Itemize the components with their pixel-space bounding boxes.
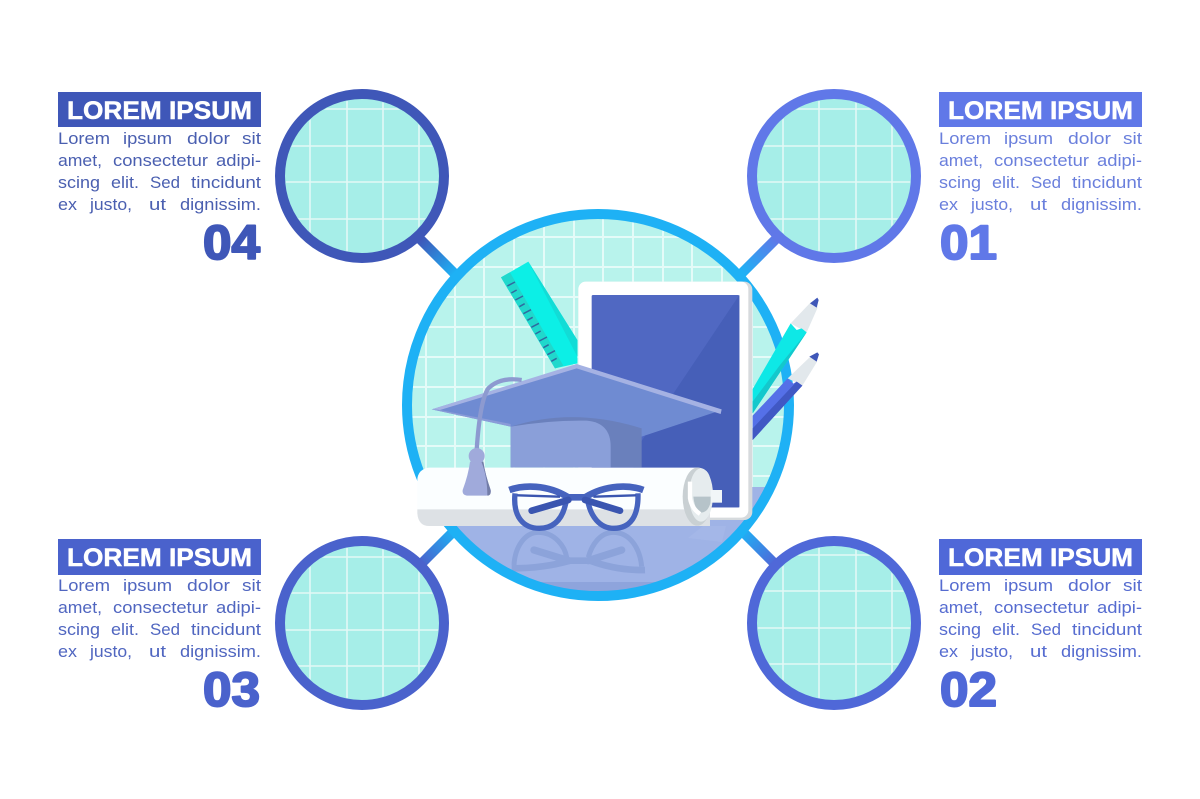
connector: center to circle 04 (410, 229, 462, 281)
body text 02 (939, 576, 1142, 661)
heading 04 (58, 92, 261, 127)
panel: text block 01 (939, 92, 1142, 270)
body text 03: tincidunt (191, 620, 261, 639)
circle 03 (270, 537, 450, 709)
body text 04: dignissim. (180, 195, 261, 214)
body text 03: ex (58, 642, 78, 661)
body text 02: ipsum (1004, 576, 1053, 595)
icon: pencils (753, 298, 819, 440)
body text 02: justo, (970, 642, 1013, 661)
body text 04: sit (242, 129, 261, 148)
icon: glasses (509, 487, 643, 528)
panel: central illustration (400, 205, 819, 607)
icon: tablet (578, 282, 752, 520)
body text 04: amet, (58, 151, 102, 170)
heading 02 (939, 539, 1142, 575)
body text 03: elit. (111, 620, 139, 639)
connector: center to circle 01 (734, 229, 786, 281)
panel: text block 02 (939, 539, 1142, 717)
body text 01: ex (939, 195, 959, 214)
icon: graduation cap (432, 364, 722, 467)
body text 01: elit. (992, 173, 1020, 192)
body text 03: adipi- (216, 598, 261, 617)
body text 03: ut (149, 642, 166, 661)
body text 04: ipsum (123, 129, 172, 148)
body text 01: consectetur (994, 151, 1089, 170)
body text 03: sit (242, 576, 261, 595)
body text 02: tincidunt (1072, 620, 1142, 639)
body text 03: consectetur (113, 598, 208, 617)
body text 04: consectetur (113, 151, 208, 170)
body text 03: Sed (150, 620, 180, 639)
body text 02: amet, (939, 598, 983, 617)
body text 02: ut (1030, 642, 1047, 661)
body text 04: Sed (150, 173, 180, 192)
heading 03: LOREM IPSUM (67, 544, 252, 572)
body text 01: amet, (939, 151, 983, 170)
body text 03: scing (58, 620, 100, 639)
body text 03 (58, 576, 261, 661)
body text 02: sit (1123, 576, 1142, 595)
glasses reflection (512, 532, 645, 570)
body text 02: adipi- (1097, 598, 1142, 617)
icon: ruler (501, 262, 577, 368)
panel: text block 03 (58, 539, 261, 717)
body text 01: Lorem (939, 129, 991, 148)
number 03: 03 (203, 664, 260, 717)
body text 04: dolor (187, 129, 230, 148)
body text 04: elit. (111, 173, 139, 192)
heading 02: LOREM IPSUM (948, 544, 1133, 572)
number 01: 01 (940, 217, 997, 270)
panel: text block 04 (58, 92, 261, 270)
body text 01: sit (1123, 129, 1142, 148)
body text 03: dignissim. (180, 642, 261, 661)
body text 03: amet, (58, 598, 102, 617)
circle 02 (745, 537, 925, 709)
body text 02: consectetur (994, 598, 1089, 617)
center circle background and grid (412, 219, 784, 591)
body text 02: elit. (992, 620, 1020, 639)
heading 01 (939, 92, 1142, 127)
heading 03 (58, 539, 261, 575)
body text 01 (939, 129, 1142, 214)
connector: center to circle 03 (410, 523, 462, 575)
body text 02: dolor (1068, 576, 1111, 595)
connector: center to circle 02 (734, 523, 786, 575)
body text 01: Sed (1031, 173, 1061, 192)
body text 01: dolor (1068, 129, 1111, 148)
body text 01: ipsum (1004, 129, 1053, 148)
body text 04 (58, 129, 261, 214)
icon: diploma scroll (417, 468, 722, 526)
body text 01: justo, (970, 195, 1013, 214)
body text 04: Lorem (58, 129, 110, 148)
circle 01 (745, 90, 925, 262)
body text 02: Sed (1031, 620, 1061, 639)
body text 04: tincidunt (191, 173, 261, 192)
body text 04: adipi- (216, 151, 261, 170)
body text 04: ex (58, 195, 78, 214)
body text 01: tincidunt (1072, 173, 1142, 192)
body text 02: scing (939, 620, 981, 639)
body text 02: Lorem (939, 576, 991, 595)
body text 03: justo, (89, 642, 132, 661)
body text 01: scing (939, 173, 981, 192)
body text 02: dignissim. (1061, 642, 1142, 661)
heading 01: LOREM IPSUM (948, 97, 1133, 125)
body text 04: ut (149, 195, 166, 214)
body text 01: ut (1030, 195, 1047, 214)
body text 01: adipi- (1097, 151, 1142, 170)
body text 03: ipsum (123, 576, 172, 595)
icon: tassel (463, 379, 522, 496)
body text 03: dolor (187, 576, 230, 595)
number 02: 02 (940, 664, 997, 717)
body text 01: dignissim. (1061, 195, 1142, 214)
circle 04 (270, 90, 450, 262)
body text 04: justo, (89, 195, 132, 214)
center circle ring (407, 214, 789, 596)
heading 04: LOREM IPSUM (67, 97, 252, 125)
body text 04: scing (58, 173, 100, 192)
body text 02: ex (939, 642, 959, 661)
number 04: 04 (203, 217, 260, 270)
body text 03: Lorem (58, 576, 110, 595)
